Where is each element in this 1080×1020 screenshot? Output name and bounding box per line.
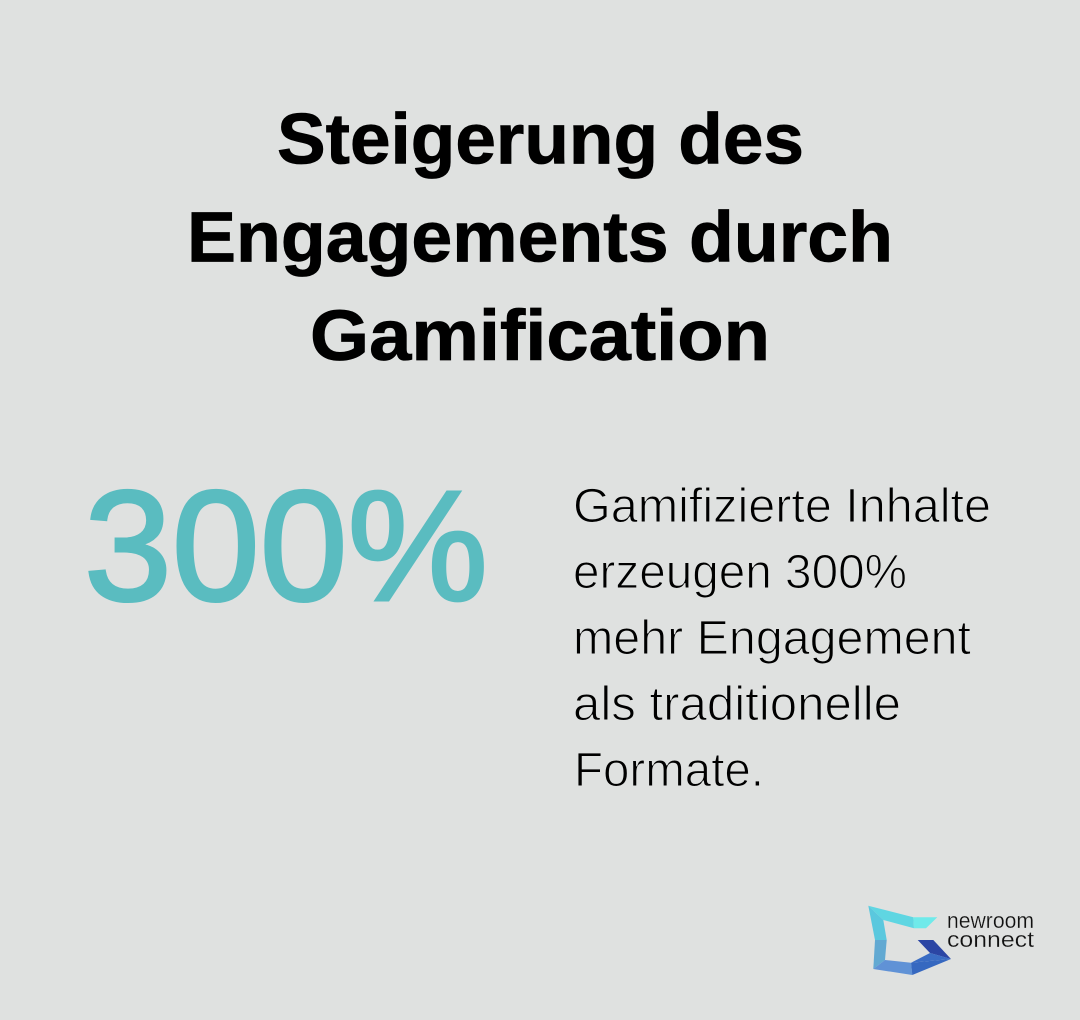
description text: Formate. xyxy=(574,744,764,797)
title: Engagements durch xyxy=(187,199,893,278)
description text: als traditionelle xyxy=(573,678,901,731)
logo: newroom connect xyxy=(868,906,1034,975)
title xyxy=(187,100,893,376)
icon: logo mark xyxy=(868,906,951,975)
title: Gamification xyxy=(310,297,770,376)
big statistic: 300%: 300% xyxy=(84,459,488,634)
logo wordmark: newroom xyxy=(947,908,1034,933)
description text: erzeugen 300% xyxy=(573,546,907,599)
logo wordmark xyxy=(947,908,1034,952)
description text: Gamifizierte Inhalte xyxy=(573,480,991,533)
logo wordmark: connect xyxy=(947,927,1034,952)
description text xyxy=(573,480,991,797)
title: Steigerung des xyxy=(277,100,804,180)
description text: mehr Engagement xyxy=(573,612,971,665)
